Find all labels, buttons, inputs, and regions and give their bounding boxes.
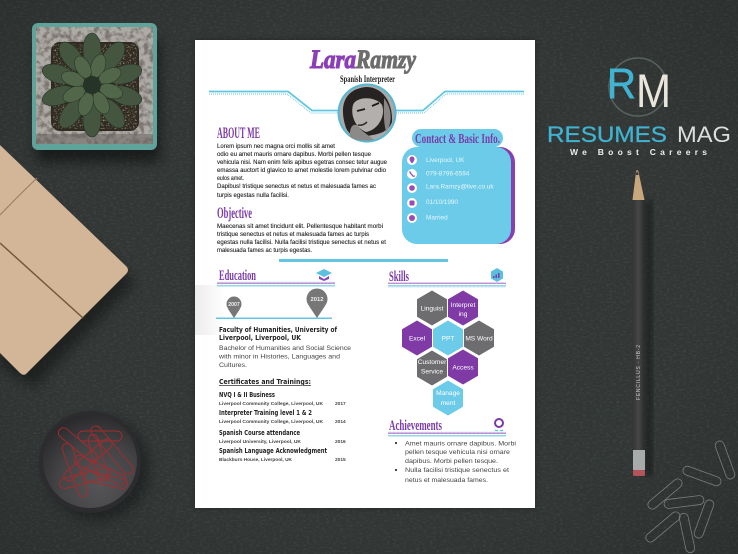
hexagon: Customer Service xyxy=(417,350,447,386)
resume sheet xyxy=(195,40,535,508)
hexagon: MS Word: MS Word xyxy=(465,336,493,342)
certificates: 2016 xyxy=(335,439,346,445)
candidate name: Lara xyxy=(309,45,356,74)
Resumes Mag logo: M xyxy=(636,64,671,117)
about me text: emassa auctort id glavico to amet molestie lorem pulvinar odio xyxy=(217,167,386,174)
hexagon: Excel: Excel xyxy=(409,336,426,342)
certificates: NVQ I & II Business xyxy=(219,391,275,399)
achievements list: dapibus. Morbi pellen tesque. xyxy=(405,458,498,465)
contact rows xyxy=(407,155,494,223)
degree: Faculty of Humanities, University of xyxy=(219,326,338,334)
contact rows: 079-8796-6594 xyxy=(426,170,470,178)
certificates: 2017 xyxy=(335,401,346,407)
certificates: Liverpool University, Liverpool, UK xyxy=(219,439,302,445)
hexagon: Interpreting xyxy=(448,290,478,326)
certificates: 2014 xyxy=(335,419,346,425)
education timeline: 2007 xyxy=(228,302,240,308)
hexagon: Customer Service: Service xyxy=(421,368,443,376)
Resumes Mag logo: R xyxy=(607,60,636,108)
certificates: 2015 xyxy=(335,457,346,463)
about me text: turpis egestas nulla facilisi. xyxy=(217,192,289,199)
hexagon: PPT: PPT xyxy=(442,336,454,342)
achievements list: Nulla facilisi tristique senectus et xyxy=(405,467,509,474)
certificates: Blackburn House, Liverpool, UK xyxy=(219,457,293,463)
skills heading: Skills xyxy=(389,269,409,285)
pencil xyxy=(632,170,653,476)
pencil: FENCILLUS · HB-2 xyxy=(636,345,642,400)
achievements list: Amet mauris ornare dapibus. Morbi xyxy=(405,440,517,448)
education timeline xyxy=(216,288,332,319)
header rule xyxy=(209,92,524,113)
contact rows: Lara.Ramzy@live.co.uk xyxy=(426,184,494,190)
certificates: Spanish Language Acknowledgment xyxy=(219,447,327,455)
Resumes Mag logo xyxy=(547,58,731,157)
objective heading: Objective xyxy=(217,205,252,222)
contact rows: 01/10/1990 xyxy=(426,199,458,206)
about me text: Lorem ipsum nec magna orci mollis sit amet xyxy=(217,143,335,150)
hexagon: Management: ment xyxy=(441,400,455,407)
job title: Spanish Interpreter xyxy=(340,74,395,84)
about me heading: ABOUT ME xyxy=(217,125,260,142)
cardboard box xyxy=(0,145,136,388)
achievements list xyxy=(395,440,517,484)
achievements list: pellen tesque vehicula nisi ornare xyxy=(405,449,510,456)
hexagon: Interpreting: Interpret xyxy=(451,302,475,309)
profile photo xyxy=(338,84,396,142)
education heading xyxy=(217,268,335,286)
contact panel xyxy=(402,129,515,244)
degree: Cultures. xyxy=(219,362,247,369)
about me text: odio eu amet mauris ornare dapibus. Morbi pellen tesque xyxy=(217,151,371,158)
contact rows: Married xyxy=(426,214,448,222)
hexagon: Management: Manage xyxy=(436,390,460,397)
hexagon: Management xyxy=(433,380,463,416)
Resumes Mag logo: RESUMES xyxy=(547,122,667,147)
certificates xyxy=(219,378,346,463)
skills hexagons xyxy=(402,290,494,416)
hexagon: Linguist: Linguist xyxy=(421,306,444,312)
achievements heading xyxy=(388,418,506,436)
degree: Liverpool, Liverpool, UK xyxy=(219,334,302,342)
objective text: tristique senectus et netus et malesuada fames ac turpis xyxy=(217,231,370,238)
certificates: Liverpool Community College, Liverpool, UK xyxy=(219,419,324,425)
candidate name: Ramzy xyxy=(355,45,416,74)
education heading: Education xyxy=(219,268,256,284)
certificates: Spanish Course attendance xyxy=(219,429,300,437)
degree: Bachelor of Humanities and Social Science xyxy=(219,345,351,352)
hexagon: Customer Service: Customer xyxy=(418,359,447,366)
about me text: vehicula nisi. Nam enim felis apibus egetras consec tetur augue xyxy=(217,159,387,166)
certificates: Certificates and Trainings: xyxy=(219,378,311,386)
objective text: Maecenas sit amet tincidunt elit. Pellentesque habitant morbi xyxy=(217,223,383,230)
Resumes Mag logo: MAG xyxy=(677,122,731,147)
degree: with minor in Histories, Languages and xyxy=(218,354,340,360)
bowl of red paper clips xyxy=(39,411,150,520)
about me text xyxy=(217,143,387,199)
about me text: eulos amet. xyxy=(217,175,244,182)
degree xyxy=(218,326,351,369)
achievements heading: Achievements xyxy=(389,418,442,434)
about me text: Dapibus! tristique senectus et netus et malesuada fames ac xyxy=(217,183,377,190)
certificates: Interpreter Training level 1 & 2 xyxy=(219,409,312,417)
hexagon: Access: Access xyxy=(452,364,474,372)
candidate name xyxy=(309,45,416,74)
objective text: egestas nulla facilisi. Nulla facilisi tristique senectus et netus et xyxy=(217,239,386,246)
objective text xyxy=(217,223,386,254)
contact rows: Liverpool, UK xyxy=(426,157,465,164)
contact heading pill: Contact & Basic Info. xyxy=(415,132,500,147)
objective text: malesuada fames ac turpis egestas. xyxy=(217,247,312,254)
achievements list: netus et malesuada fames. xyxy=(405,477,488,484)
plant pot with succulent xyxy=(32,23,160,162)
skills heading xyxy=(388,269,506,288)
Resumes Mag logo: We Boost Careers xyxy=(570,147,707,157)
section divider xyxy=(279,259,448,262)
icon: bar chart badge xyxy=(491,268,503,282)
certificates: Liverpool Community College, Liverpool, UK xyxy=(219,401,324,407)
education timeline: 2012 xyxy=(311,297,323,303)
hexagon: Interpreting: ing xyxy=(459,311,468,318)
icon: graduation cap xyxy=(316,269,332,281)
grey paper clips xyxy=(644,440,736,553)
icon: medal xyxy=(495,419,503,431)
